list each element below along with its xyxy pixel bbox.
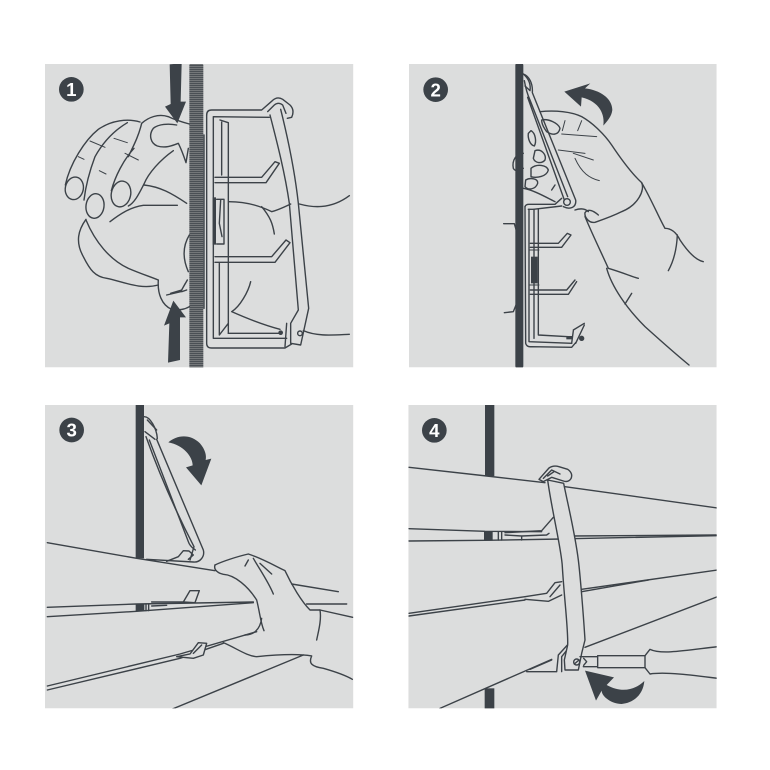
- badge: number 3: [59, 418, 84, 442]
- arrow: push down: [165, 63, 186, 123]
- arrow: rotate up: [564, 83, 612, 126]
- arrow: rotate down: [168, 436, 211, 485]
- panel: step 4: [408, 405, 718, 709]
- raised bracket arm: [144, 417, 204, 562]
- wall post: [485, 405, 494, 476]
- badge: number 4: 4: [429, 420, 440, 441]
- wall post: [515, 63, 523, 368]
- wall post: [136, 405, 144, 558]
- wire hook middle: [146, 591, 199, 611]
- wire hook middle: [525, 582, 562, 601]
- blind slat edges: [47, 543, 353, 709]
- arrow: push up: [164, 301, 186, 363]
- panel: step 3: [45, 405, 353, 709]
- arm behind bracket: [229, 196, 349, 335]
- badge: number 2: 2: [430, 79, 441, 100]
- screwdriver: [580, 647, 718, 678]
- threaded rod: [189, 64, 203, 368]
- wire hook lower: [527, 644, 568, 672]
- hand pulling arm: [513, 111, 703, 365]
- wire hook upper: [498, 517, 553, 540]
- small hook: [167, 280, 187, 295]
- badge: number 3: 3: [66, 420, 77, 441]
- badge: number 4: [422, 418, 447, 443]
- wire hooks behind post: [504, 224, 517, 313]
- hand on slat: [215, 554, 352, 679]
- wire bracket: [204, 98, 309, 348]
- panel: step 2: [409, 63, 717, 368]
- hand gripping rod: [63, 115, 189, 310]
- badge: number 1: 1: [66, 79, 77, 100]
- blind slat edges: [409, 467, 718, 708]
- fingertip nails: [63, 175, 133, 219]
- wire hook lower: [177, 643, 207, 658]
- raised arm of bracket: [523, 74, 576, 208]
- panel: step 1: [45, 63, 353, 368]
- bracket arm: [539, 466, 585, 670]
- wire bracket folded: [525, 198, 584, 347]
- badge: number 2: [423, 77, 448, 102]
- screw head: [574, 659, 580, 665]
- badge: number 1: [59, 77, 84, 102]
- arrow: rotate screwdriver: [585, 671, 644, 704]
